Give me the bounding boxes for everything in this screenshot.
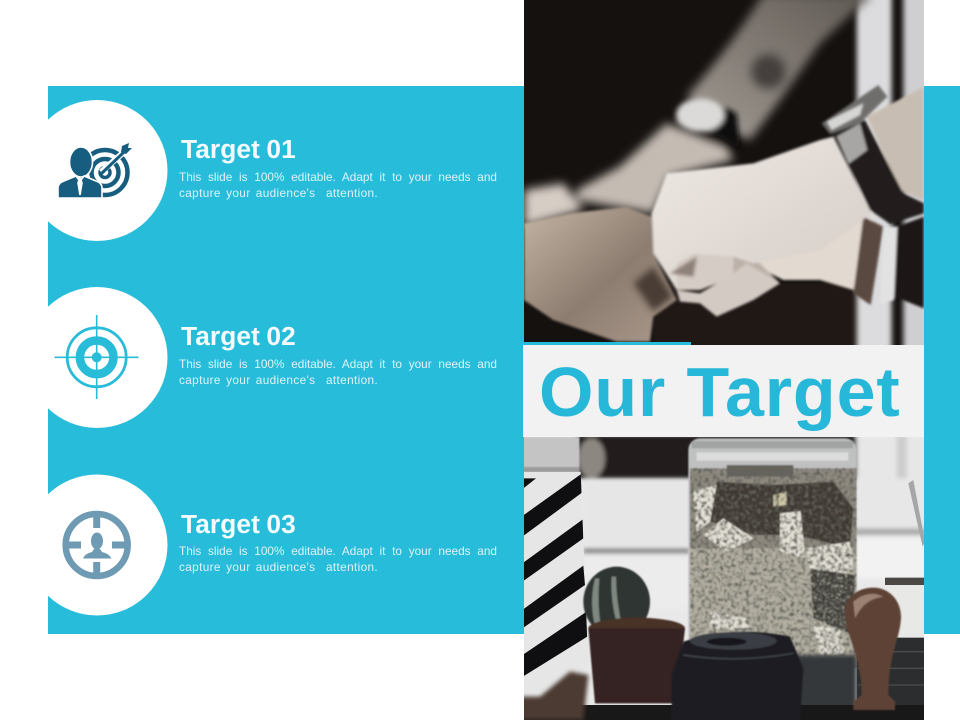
icon circle 3	[26, 474, 168, 616]
panel: title band	[523, 345, 924, 437]
text: Target 01 description: capture your audience's attention.	[179, 186, 378, 200]
panel: teal right background	[924, 86, 960, 634]
panel: teal left background	[48, 86, 524, 634]
icon: person in crosshair	[66, 514, 128, 576]
icon: businessman with target	[58, 143, 132, 198]
bottle	[520, 437, 579, 474]
icon circle 1	[26, 100, 168, 241]
text: Target 03 description	[179, 544, 497, 574]
title: Our Target	[539, 353, 901, 431]
text: Target 02 description: capture your audience's attention.	[179, 373, 378, 387]
wooden stamp	[845, 588, 901, 710]
jar	[688, 438, 857, 668]
photo: fist bump	[524, 0, 924, 345]
text: Target 01 description	[179, 170, 497, 200]
circles and icons	[48, 100, 168, 616]
text: Target 03 description: This slide is 100% editable. Adapt it to your needs and	[179, 544, 497, 558]
text: Target 02 description: This slide is 100% editable. Adapt it to your needs and	[179, 357, 497, 371]
text: Target 03 description: capture your audience's attention.	[179, 560, 378, 574]
photo: desk with jar	[524, 437, 924, 720]
text: Target 01 description: This slide is 100% editable. Adapt it to your needs and	[179, 170, 497, 184]
accent line above title	[523, 342, 691, 345]
heading: Target 03: Target 03	[181, 509, 296, 539]
icon: crosshair target	[54, 315, 138, 399]
dark lens	[672, 632, 803, 720]
icon circle 2	[26, 287, 168, 428]
cactus and pot	[583, 567, 685, 703]
heading: Target 01: Target 01	[181, 134, 296, 164]
text: Target 02 description	[179, 357, 497, 387]
table foreground	[857, 635, 930, 720]
heading: Target 02: Target 02	[181, 321, 296, 351]
